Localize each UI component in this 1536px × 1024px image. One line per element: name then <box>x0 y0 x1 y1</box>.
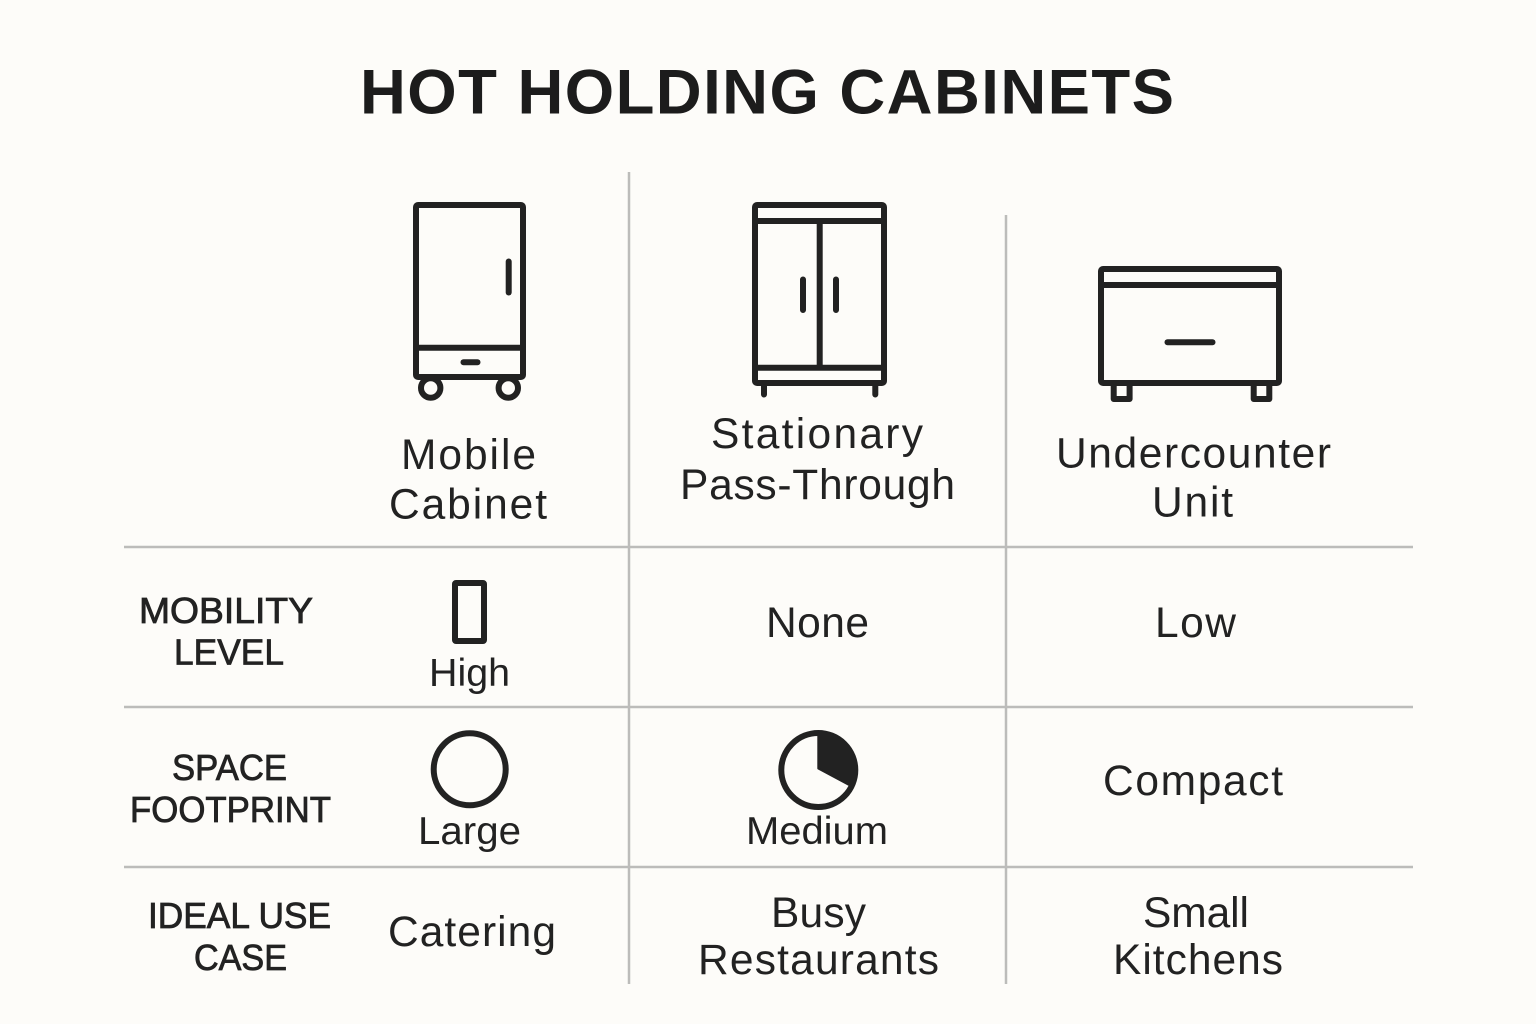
row heading: space footprint: FOOTPRINT <box>130 789 331 830</box>
label: undercounter unit: Undercounter <box>1056 430 1331 478</box>
icon: mobile cabinet <box>416 205 523 398</box>
value: busy restaurants: Busy <box>771 890 867 937</box>
row heading: ideal use case: IDEAL USE <box>148 895 331 936</box>
title: HOT HOLDING CABINETS <box>360 58 1174 128</box>
row heading: ideal use case <box>148 895 331 978</box>
icon: medium pie <box>781 733 855 807</box>
icon: high mobility rectangle <box>455 583 484 641</box>
value: catering: Catering <box>388 909 556 956</box>
row heading: mobility level: LEVEL <box>174 632 284 672</box>
value: low: Low <box>1155 600 1236 647</box>
row heading: mobility level: MOBILITY <box>139 590 313 631</box>
label: mobile cabinet: Cabinet <box>389 482 547 528</box>
label: undercounter unit: Unit <box>1152 480 1233 526</box>
value: medium: Medium <box>746 810 888 853</box>
label: undercounter unit <box>1056 430 1331 526</box>
label: stationary pass-through: Pass-Through <box>680 462 955 509</box>
label: mobile cabinet <box>389 432 547 528</box>
icon: stationary pass-through cabinet <box>755 205 884 394</box>
value: high: High <box>429 652 510 695</box>
label: stationary pass-through: Stationary <box>711 411 924 458</box>
row heading: ideal use case: CASE <box>194 937 287 978</box>
icon: large circle <box>434 733 506 805</box>
value: small kitchens <box>1113 890 1283 984</box>
row heading: space footprint <box>130 747 331 830</box>
label: stationary pass-through <box>680 411 955 509</box>
value: small kitchens: Kitchens <box>1113 937 1283 984</box>
icon: undercounter unit <box>1101 269 1279 399</box>
row heading: mobility level <box>139 590 313 672</box>
value: compact: Compact <box>1103 758 1283 805</box>
label: mobile cabinet: Mobile <box>401 432 536 479</box>
value: none: None <box>766 600 869 647</box>
value: busy restaurants <box>698 890 939 984</box>
value: large: Large <box>418 810 521 853</box>
row heading: space footprint: SPACE <box>172 747 287 788</box>
value: small kitchens: Small <box>1143 890 1249 937</box>
value: busy restaurants: Restaurants <box>698 937 939 984</box>
